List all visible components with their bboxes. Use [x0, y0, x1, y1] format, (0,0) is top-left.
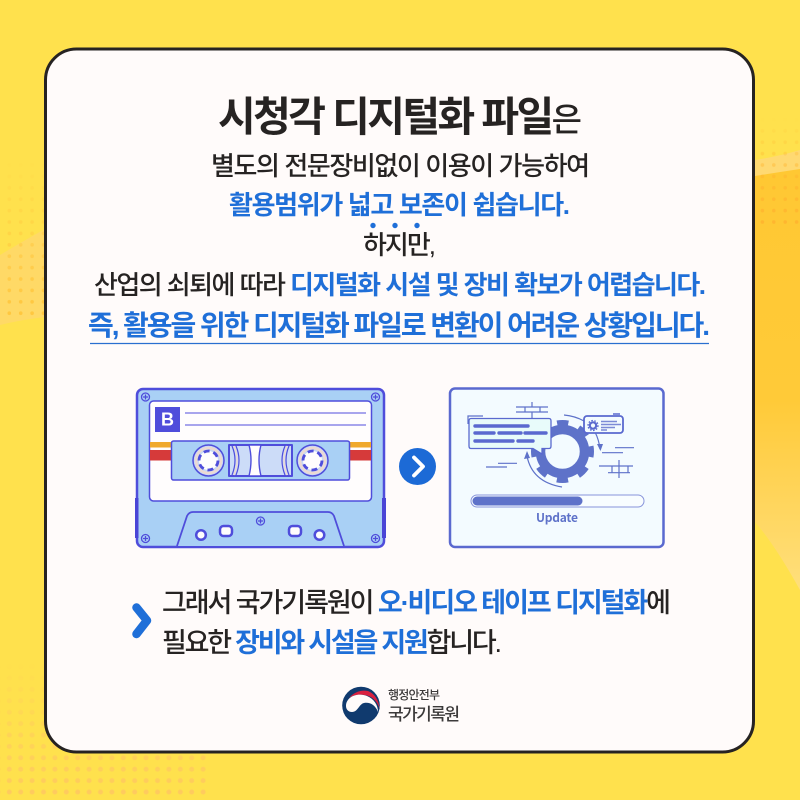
icon: circuit lines	[468, 402, 634, 487]
text: support line 2: 필요한 장비와 시설을 지원합니다.	[162, 628, 502, 658]
emphasis dots	[370, 223, 420, 228]
icon: speech bubble	[469, 418, 551, 454]
logo: national archives	[342, 687, 460, 724]
icon: taegeuk emblem	[342, 687, 380, 724]
icon: cassette tape	[135, 389, 386, 547]
title: 시청각 디지털화 파일은	[218, 94, 582, 140]
icon: small settings card	[584, 414, 623, 433]
icon: gear arrowheads	[524, 444, 603, 459]
arrow: circle chevron	[399, 448, 436, 485]
panel: main card	[46, 49, 754, 752]
text: line 2: 별도의 전문장비없이 이용이 가능하여	[211, 151, 590, 181]
icon: cassette bottom plate	[177, 512, 344, 546]
text: ministry: 행정안전부	[388, 687, 440, 702]
text: however: 하지만,	[363, 230, 436, 260]
icon: tape window	[229, 445, 292, 476]
icon: gear	[534, 424, 590, 480]
icon: right reel	[297, 445, 328, 476]
label: update: Update	[536, 509, 578, 526]
icon: cassette screws	[142, 393, 380, 542]
icon: left reel	[193, 445, 224, 476]
icon: cassette label B: B	[161, 410, 174, 430]
text: line 6 underlined: 즉, 활용을 위한 디지털화 파일로 변환이 어려운 상황입니다.	[88, 310, 710, 341]
progress bar	[471, 495, 644, 507]
text: archives: 국가기록원	[388, 705, 460, 724]
text: support line 1: 그래서 국가기록원이 오·비디오 테이프 디지털화에	[162, 588, 671, 618]
icon: cassette label B	[155, 407, 180, 432]
text: line 5: 산업의 쇠퇴에 따라 디지털화 시설 및 장비 확보가 어렵습니다.	[94, 270, 706, 300]
icon: update panel	[450, 388, 664, 547]
text: highlighted benefit: 활용범위가 넓고 보존이 쉽습니다.	[229, 190, 570, 220]
icon: bullet chevron	[136, 608, 147, 634]
